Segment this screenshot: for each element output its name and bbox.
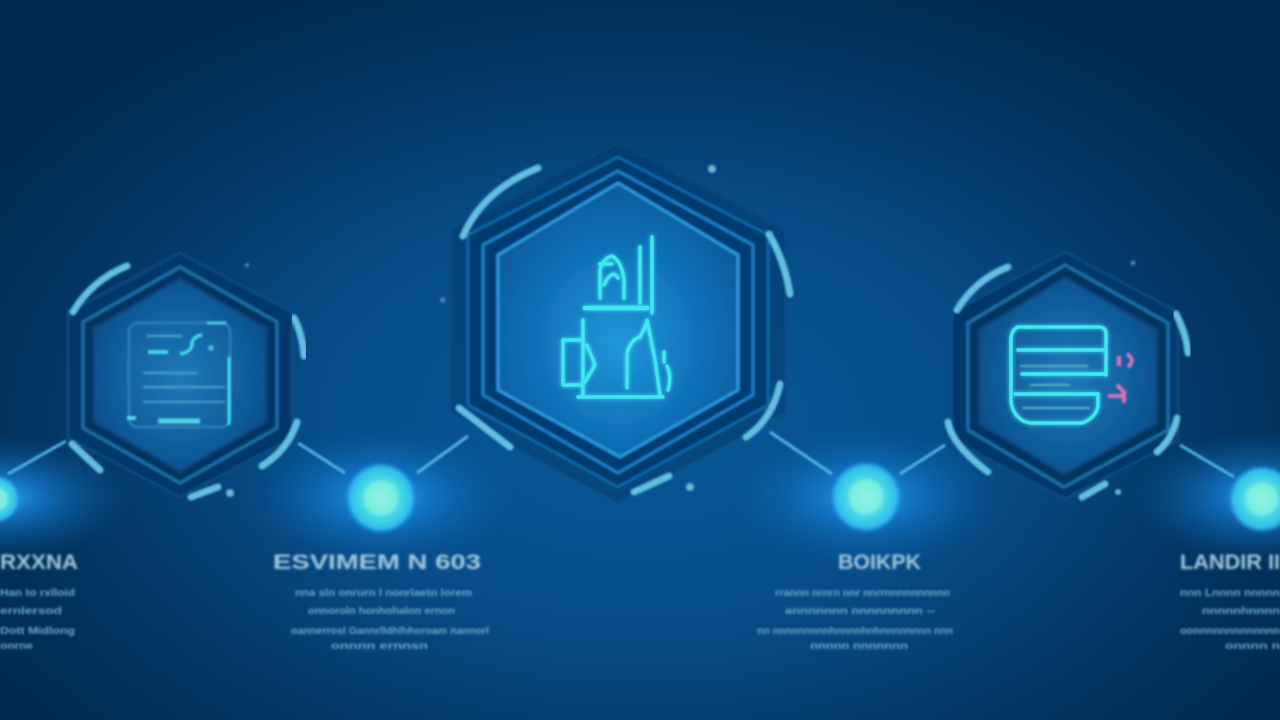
text block: right step: nnn Lnnnn nnnnn [1180, 588, 1280, 599]
text block: left step: onrne [0, 641, 34, 652]
text block: right step [1180, 551, 1280, 652]
icon: machine with flask and columns [563, 237, 670, 397]
icon: stacked database [1011, 327, 1132, 423]
text block: second step: nna sln onrurn l nonrlaetn lorem [295, 588, 472, 599]
text block: second step [273, 551, 489, 652]
center hexagon rings [451, 143, 785, 502]
center hexagon accent arcs [440, 165, 790, 492]
text block: right step: nnnnnhnnnn [1202, 606, 1280, 617]
left hexagon accent arcs [72, 262, 304, 497]
text block: left step [0, 551, 78, 652]
text block: left step: Han to rxlloid [0, 588, 75, 599]
heading: left step: RXXNA [0, 551, 78, 574]
hexagon: left document step [68, 253, 304, 497]
text block: left step: Dott Midlong [0, 626, 75, 637]
node: right edge [1228, 465, 1280, 533]
node: second step [345, 462, 417, 534]
icon: pink markers [1108, 354, 1132, 403]
hexagon: right database step [948, 252, 1188, 499]
icon: document [127, 323, 230, 427]
node: left edge [0, 475, 20, 523]
text block: second step: oannerrosl Gannrlldhlhhoroam nannorl [291, 626, 489, 637]
text block: second step: onnnn ernnsn [331, 641, 428, 652]
text block: right step: oonnnnnnnnnnnnn [1180, 626, 1280, 637]
hexagon: center main step [440, 143, 790, 502]
heading: right step: LANDIR II [1180, 551, 1280, 574]
node glows [0, 427, 1280, 567]
text block: right step: onnnn n [1225, 641, 1280, 652]
text block: third step: nnnnn nnnnnnn [810, 641, 908, 652]
text block: third step: annnnnnn nnnnnnnnn -- [785, 606, 935, 617]
text block: left step: ernlersod [0, 606, 62, 617]
text block: third step: nn nnnnnnnnnhnnnnhnhnnnnnnnn nnn [757, 626, 953, 637]
text block: third step: rrannn nrnrn nnr nnrrnnnnnnnnnn [775, 588, 950, 599]
right hexagon accent arcs [948, 260, 1188, 497]
text block: second step: onnoroln honhohalon ernon [308, 606, 455, 617]
left hexagon rings [68, 253, 292, 497]
node: third step [830, 461, 902, 533]
text block: third step [757, 551, 953, 652]
right hexagon rings [952, 252, 1178, 499]
connector lines [8, 432, 1234, 477]
heading: second step: ESVIMEM N 603 [273, 551, 481, 574]
heading: third step: BOIKPK [838, 551, 921, 574]
